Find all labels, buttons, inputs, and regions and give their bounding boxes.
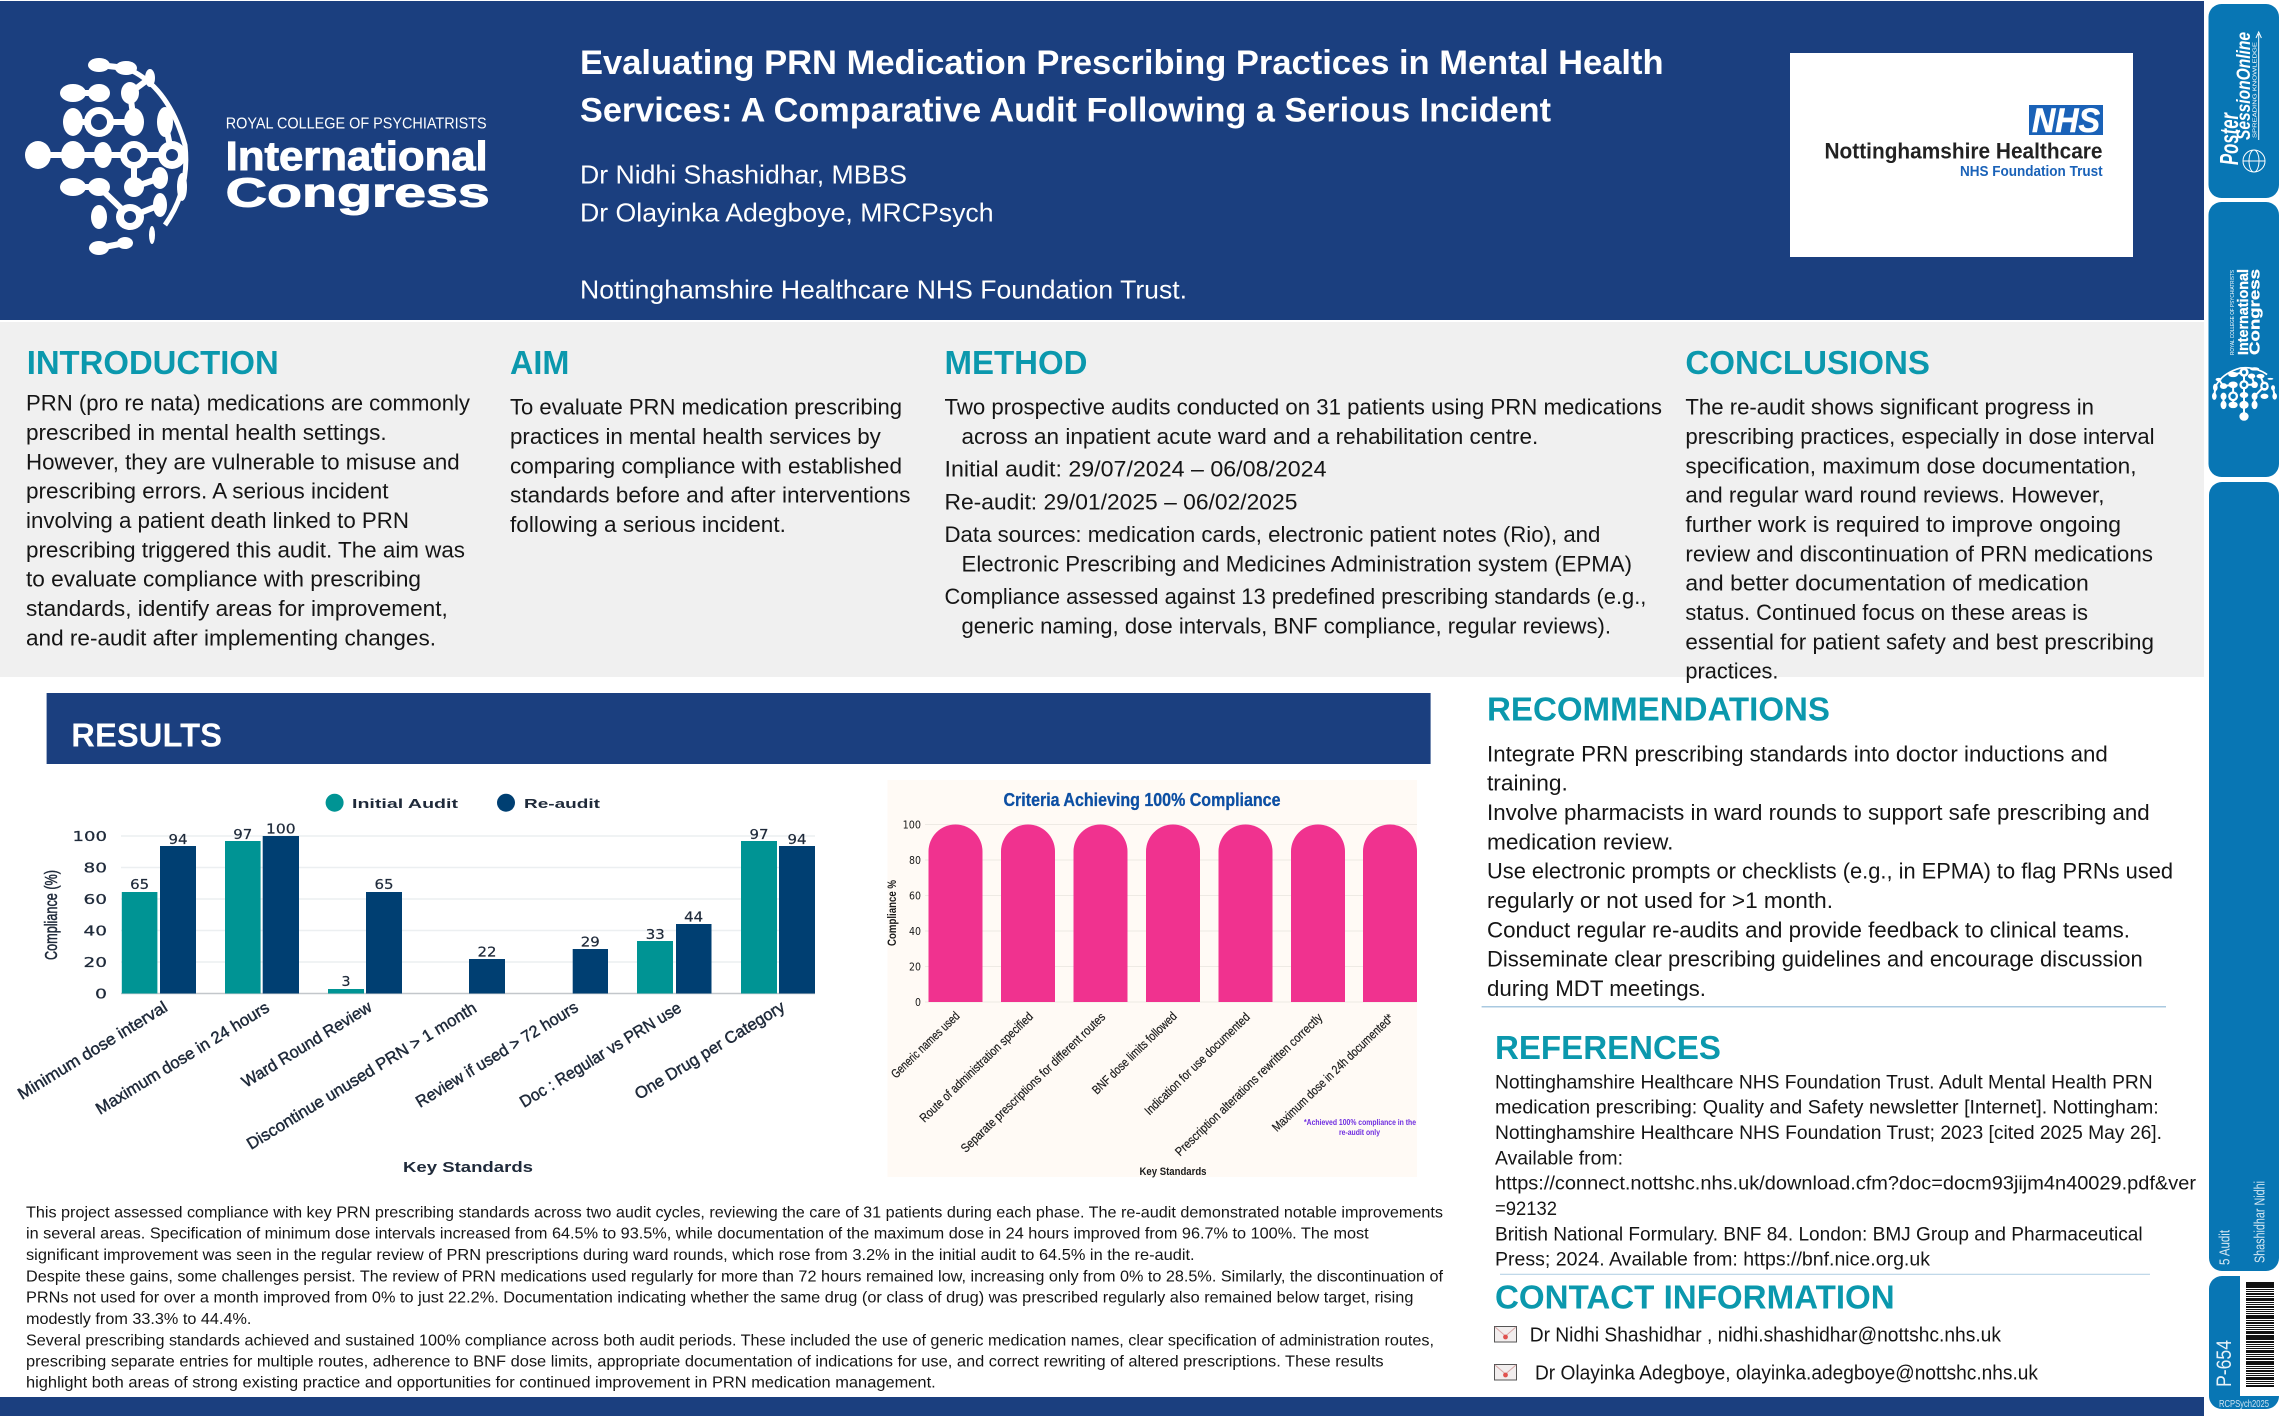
value labels: 29: [581, 936, 600, 950]
category labels: Ward Round Review: [239, 998, 375, 1091]
category labels: Indication for use documented: [1142, 1010, 1253, 1118]
text block: status. Continued focus on these areas is: [1685, 600, 2088, 625]
text block: results narrative: in several areas. Specification of minimum dose intervals increased from 64.5% to 93.5%, while documentation of the maximum dose in 24 hours improved from 96.7% to 100%. The most: [26, 1226, 1369, 1243]
text block: regularly or not used for >1 month.: [1487, 888, 1833, 913]
text block: =92132: [1495, 1199, 1557, 1220]
x axis title: Key Standards: [1140, 1166, 1206, 1178]
text block: British National Formulary. BNF 84. London: BMJ Group and Pharmaceutical: [1495, 1224, 2143, 1245]
category labels: Doc : Regular vs PRN use: [517, 999, 685, 1111]
panel: side tab author and track: [2209, 482, 2279, 1271]
y axis ticks: 40: [909, 925, 921, 938]
text block: Integrate PRN prescribing standards into doctor inductions and: [1487, 741, 2108, 766]
text block: [1685, 395, 2155, 684]
y axis ticks: 80: [84, 860, 107, 876]
bar chart: criteria achieving 100% compliance: [887, 780, 1417, 1178]
text block: [26, 391, 470, 650]
text block: results narrative: significant improvement was seen in the regular review of PRN prescriptions during ward rounds, which rose from 3.2% in the initial audit to 64.5% in the re-audit.: [26, 1247, 1195, 1264]
value labels: 94: [788, 833, 806, 848]
x axis title: Key Standards: [403, 1160, 533, 1176]
text block: results narrative: Despite these gains, some challenges persist. The review of PRN medications used regularly for more than 72 hours remained low, increasing only from 0% to 28.5%. Similarly, the discontinuation of: [26, 1268, 1444, 1285]
legend: [326, 794, 601, 812]
category labels: BNF dose limits followed: [1089, 1009, 1180, 1097]
value labels: 33: [646, 928, 665, 943]
y axis ticks: 20: [909, 960, 921, 974]
panel: side tab International Congress: ROYAL COLLEGE OF PSYCHIATRISTS: [2230, 270, 2236, 355]
panel: side tab International Congress: Congress: [2246, 269, 2264, 355]
y axis ticks: 60: [84, 892, 107, 908]
bar chart: key standards initial audit vs re-audit: [15, 794, 815, 1176]
text block: standards before and after interventions: [510, 483, 910, 508]
panel: grey summary band: [0, 322, 2204, 677]
category labels: Generic names used: [888, 1009, 962, 1081]
panel: side tab International Congress: [2208, 202, 2279, 477]
value labels: 94: [168, 833, 188, 848]
text block: medication review.: [1487, 829, 1673, 854]
authors and organisation: Nottinghamshire Healthcare NHS Foundation Trust.: [580, 274, 1187, 304]
text block: https://connect.nottshc.nhs.uk/download.cfm?doc=docm93jijm4n40029.pdf&ver: [1495, 1174, 2197, 1195]
footnote: *Achieved 100% compliance in the: [1304, 1117, 1416, 1127]
panel: side tab poster number and barcode: [2209, 1276, 2279, 1410]
legend: Initial Audit: [352, 796, 459, 811]
text block: Nottinghamshire Healthcare NHS Foundation Trust; 2023 [cited 2025 May 26].: [1495, 1123, 2162, 1144]
text block: involving a patient death linked to PRN: [26, 508, 409, 533]
value labels: 97: [233, 828, 252, 843]
panel: introduction: [26, 344, 470, 650]
text block: comparing compliance with established: [510, 453, 902, 478]
y axis ticks: 40: [84, 924, 107, 940]
authors and organisation: [580, 159, 1187, 304]
contact: Olayinka Adegboye: Dr Olayinka Adegboye, olayinka.adegboye@nottshc.nhs.uk: [1535, 1362, 2039, 1384]
logo text: Congress: [226, 170, 490, 216]
text block: and re-audit after implementing changes.: [26, 625, 436, 650]
category labels: Review if used > 72 hours: [413, 998, 582, 1111]
text block: generic naming, dose intervals, BNF compliance, regular reviews).: [962, 613, 1611, 638]
text block: practices.: [1685, 659, 1778, 684]
contact: Nidhi Shashidhar: Dr Nidhi Shashidhar , nidhi.shashidhar@nottshc.nhs.uk: [1530, 1325, 2002, 1347]
legend: Re-audit: [524, 796, 601, 811]
authors and organisation: Dr Olayinka Adegboye, MRCPsych: [580, 198, 994, 228]
icon: globe of connected dots: [25, 58, 187, 255]
text block: review and discontinuation of PRN medications: [1685, 541, 2153, 566]
panel: side tab author and track: 5 Audit: [2217, 1229, 2234, 1265]
icon: small globe: [2212, 367, 2277, 421]
heading: METHOD: [944, 344, 1088, 381]
category labels: One Drug per Category: [632, 998, 789, 1103]
value labels: 22: [478, 946, 496, 960]
panel: conclusions: [1685, 344, 2155, 684]
text block: [944, 395, 1662, 638]
text block: PRN (pro re nata) medications are commonly: [26, 391, 470, 416]
text block: and better documentation of medication: [1685, 571, 2089, 596]
value labels: 44: [684, 910, 703, 926]
text block: [1495, 1072, 2197, 1271]
icon: envelope: [1494, 1364, 1516, 1380]
text block: results narrative: highlight both areas of strong existing practice and opportunities for continued improvement in PRN medication management.: [26, 1375, 936, 1392]
value labels: 97: [750, 828, 768, 843]
text block: Disseminate clear prescribing guidelines and encourage discussion: [1487, 947, 2143, 972]
text block: However, they are vulnerable to misuse and: [26, 449, 460, 474]
category labels: Route of administration specified: [917, 1009, 1036, 1125]
panel: recommendations: [1487, 691, 2173, 1001]
text block: Nottinghamshire Healthcare NHS Foundation Trust. Adult Mental Health PRN: [1495, 1072, 2153, 1093]
y axis title: Compliance (%): [41, 870, 61, 960]
y axis ticks: 0: [95, 986, 107, 1002]
y axis ticks: 100: [72, 829, 107, 845]
text block: The re-audit shows significant progress in: [1685, 395, 2094, 420]
text block: across an inpatient acute ward and a rehabilitation centre.: [962, 424, 1538, 449]
category labels: Separate prescriptions for different routes: [958, 1010, 1108, 1155]
text block: practices in mental health services by: [510, 424, 881, 449]
logo text: International: [226, 133, 488, 179]
y axis ticks: [903, 818, 921, 1009]
category labels: Maximum dose in 24h documented*: [1269, 1011, 1396, 1134]
logo: NHS Nottinghamshire Healthcare: NHS: [2032, 102, 2100, 140]
chart title: Criteria Achieving 100% Compliance: [1004, 790, 1280, 810]
text block: prescribing practices, especially in dose interval: [1685, 424, 2155, 449]
panel: side tab author and track: Shashidhar Nidhi: [2252, 1181, 2269, 1263]
panel: references: [1495, 1029, 2197, 1271]
value labels: 65: [374, 878, 394, 893]
text block: standards, identify areas for improvement,: [26, 596, 448, 621]
text block: prescribing errors. A serious incident: [26, 479, 388, 504]
logo text: [226, 115, 490, 216]
y axis ticks: 20: [84, 955, 107, 971]
text block: specification, maximum dose documentation,: [1685, 453, 2136, 478]
title: Evaluating PRN Medication Prescribing Practices in Mental Health: [580, 44, 1664, 82]
y axis ticks: [72, 829, 107, 1002]
category labels: Minimum dose interval: [15, 998, 171, 1103]
logo text: ROYAL COLLEGE OF PSYCHIATRISTS: [226, 115, 487, 132]
authors and organisation: Dr Nidhi Shashidhar, MBBS: [580, 159, 907, 189]
heading: results banner: RESULTS: [71, 717, 222, 754]
text block: results narrative: This project assessed compliance with key PRN prescribing standards across two audit cycles, reviewing the care of 31 patients during each phase. The re-audit demonstrated notable improvements: [26, 1204, 1443, 1221]
text block: during MDT meetings.: [1487, 976, 1706, 1001]
heading: CONCLUSIONS: [1685, 344, 1930, 381]
text block: and regular ward round reviews. However,: [1685, 483, 2104, 508]
logo: NHS Nottinghamshire Healthcare: [1790, 53, 2133, 257]
text block: Data sources: medication cards, electronic patient notes (Rio), and: [944, 522, 1600, 547]
text block: results narrative: PRNs not used for over a month improved from 0% to just 22.2%. Documentation indicating whether the same drug (or class of drug) was prescribed regularly also remained below target, rising: [26, 1290, 1413, 1307]
text block: Compliance assessed against 13 predefined prescribing standards (e.g.,: [944, 584, 1646, 609]
text block: results narrative: [26, 1204, 1444, 1392]
text block: Electronic Prescribing and Medicines Administration system (EPMA): [962, 551, 1632, 576]
text block: Two prospective audits conducted on 31 patients using PRN medications: [944, 395, 1662, 420]
logo: International Congress: [25, 58, 490, 255]
title: Services: A Comparative Audit Following a Serious Incident: [580, 92, 1551, 130]
panel: bottom bar: [0, 1397, 2204, 1416]
panel: contact information: [1494, 1278, 2039, 1384]
bars: [928, 824, 1417, 1002]
logo: NHS Nottinghamshire Healthcare: NHS Foundation Trust: [1960, 163, 2103, 180]
text block: medication prescribing: Quality and Safety newsletter [Internet]. Nottingham:: [1495, 1098, 2159, 1119]
poster number: P-654: [2213, 1340, 2236, 1387]
y axis ticks: 80: [909, 854, 921, 867]
heading: REFERENCES: [1495, 1029, 1721, 1066]
category labels: [15, 998, 789, 1153]
logo: NHS Nottinghamshire Healthcare: Nottinghamshire Healthcare: [1824, 138, 2102, 163]
text block: results narrative: modestly from 33.3% to 44.4%.: [26, 1311, 251, 1328]
text block: Conduct regular re-audits and provide feedback to clinical teams.: [1487, 917, 2130, 942]
text block: prescribed in mental health settings.: [26, 420, 387, 445]
value labels: 65: [130, 878, 149, 893]
footnote: [1304, 1117, 1416, 1137]
y axis ticks: 0: [915, 996, 921, 1009]
category labels: Maximum dose in 24 hours: [93, 999, 273, 1118]
y axis ticks: 60: [909, 890, 921, 902]
icon: envelope: [1494, 1326, 1516, 1342]
text block: essential for patient safety and best prescribing: [1685, 629, 2154, 654]
text block: Use electronic prompts or checklists (e.g., in EPMA) to flag PRNs used: [1487, 859, 2173, 884]
category labels: Prescription alterations rewritten correctly: [1172, 1010, 1326, 1159]
barcode: [2246, 1282, 2274, 1387]
panel: header band: [0, 1, 2204, 320]
text block: results narrative: prescribing separate entries for multiple routes, adherence to BNF dose limits, appropriate documentation of indications for use, and correct rewriting of altered prescriptions. These results: [26, 1354, 1384, 1371]
text block: Available from:: [1495, 1148, 1623, 1169]
text block: to evaluate compliance with prescribing: [26, 567, 421, 592]
panel: side tab Poster Session Online: SPREADING KNOWLEDGE: [2252, 41, 2258, 138]
y axis ticks: 100: [903, 818, 921, 832]
heading: AIM: [510, 344, 569, 381]
text block: To evaluate PRN medication prescribing: [510, 395, 902, 420]
value labels: 100: [266, 822, 296, 838]
heading: CONTACT INFORMATION: [1495, 1278, 1895, 1315]
title: [580, 44, 1664, 130]
bars: initial audit: [122, 841, 777, 994]
bars: re-audit: [160, 836, 815, 994]
panel: side tab Poster Session Online: [2208, 4, 2279, 198]
text block: prescribing triggered this audit. The aim was: [26, 537, 465, 562]
heading: RECOMMENDATIONS: [1487, 691, 1830, 728]
panel: aim: [510, 344, 910, 537]
panel: method: [944, 344, 1662, 638]
y axis title: Compliance %: [887, 880, 899, 946]
text block: following a serious incident.: [510, 512, 786, 537]
text block: [510, 395, 910, 537]
text block: Re-audit: 29/01/2025 – 06/02/2025: [944, 489, 1297, 514]
heading: results banner: [47, 693, 1431, 764]
panel: side tab Poster Session Online: Poster: [2214, 112, 2244, 165]
text block: Press; 2024. Available from: https://bnf.nice.org.uk: [1495, 1250, 1930, 1271]
text block: Involve pharmacists in ward rounds to support safe prescribing and: [1487, 800, 2150, 825]
text block: [1487, 741, 2173, 1001]
category labels: Discontinue unused PRN > 1 month: [244, 999, 480, 1153]
panel: side tab International Congress: International: [2235, 269, 2252, 355]
category labels: [888, 1009, 1396, 1159]
text block: training.: [1487, 771, 1568, 796]
panel: side tab Poster Session Online: SessionOnline: [2234, 32, 2255, 140]
value labels: [130, 822, 807, 990]
value labels: 3: [342, 975, 350, 990]
text block: Initial audit: 29/07/2024 – 06/08/2024: [944, 457, 1326, 482]
text block: further work is required to improve ongoing: [1685, 512, 2121, 537]
footnote: re-audit only: [1339, 1127, 1380, 1137]
heading: INTRODUCTION: [27, 344, 279, 381]
text block: results narrative: Several prescribing standards achieved and sustained 100% compliance across both audit periods. These included the use of generic medication names, clear specification of administration routes,: [26, 1332, 1434, 1349]
